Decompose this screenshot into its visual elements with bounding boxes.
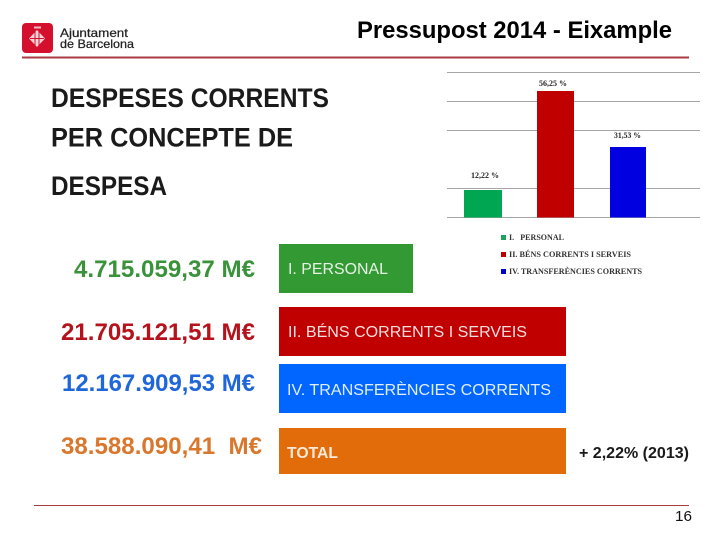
page number: 16 [675, 508, 692, 525]
heading: despeses corrents per concepte de despesa [51, 83, 329, 201]
heading: despeses corrents per concepte de despesa: DESPESES CORRENTS [51, 83, 329, 113]
row: bens corrents i serveis [61, 307, 566, 356]
callout: change versus 2013: + 2,22% (2013) [579, 445, 689, 462]
row: transferencies corrents [62, 364, 566, 413]
row: personal [74, 244, 413, 293]
bar: personal: 12,22 % [471, 171, 499, 180]
bar: transferencies corrents [610, 131, 646, 218]
chart legend: II. BÉNS CORRENTS I SERVEIS [509, 249, 632, 259]
bar: transferencies corrents: 31,53 % [614, 131, 641, 140]
bar: bens corrents i serveis [537, 79, 574, 218]
chart legend: IV. TRANSFERÈNCIES CORRENTS [509, 266, 643, 276]
logo: Ajuntament de Barcelona: Ajuntament [60, 26, 129, 40]
row: personal: 4.715.059,37 M€ [74, 256, 255, 283]
row: total: TOTAL [287, 445, 338, 462]
chart legend: I. PERSONAL [509, 233, 564, 242]
heading: despeses corrents per concepte de despesa: PER CONCEPTE DE [51, 122, 293, 152]
heading: despeses corrents per concepte de despesa: DESPESA [51, 171, 167, 201]
logo: Ajuntament de Barcelona [22, 23, 134, 53]
logo: Ajuntament de Barcelona: de Barcelona [60, 37, 134, 51]
row: transferencies corrents: IV. TRANSFERÈNCIES CORRENTS [287, 380, 551, 399]
bar: personal [464, 171, 502, 218]
row: total [61, 428, 566, 474]
bar: bens corrents i serveis: 56,25 % [539, 79, 567, 88]
chart legend [501, 233, 643, 276]
bar chart [447, 72, 700, 218]
title: Pressupost 2014 - Eixample [357, 17, 672, 44]
header rule [22, 56, 689, 58]
row: bens corrents i serveis: II. BÉNS CORRENTS I SERVEIS [288, 322, 527, 341]
footer rule [34, 505, 689, 506]
row: total: 38.588.090,41 M€ [61, 433, 262, 460]
row: transferencies corrents: 12.167.909,53 M€ [62, 370, 255, 397]
row: bens corrents i serveis: 21.705.121,51 M€ [61, 319, 255, 346]
row: personal: I. PERSONAL [288, 261, 388, 278]
